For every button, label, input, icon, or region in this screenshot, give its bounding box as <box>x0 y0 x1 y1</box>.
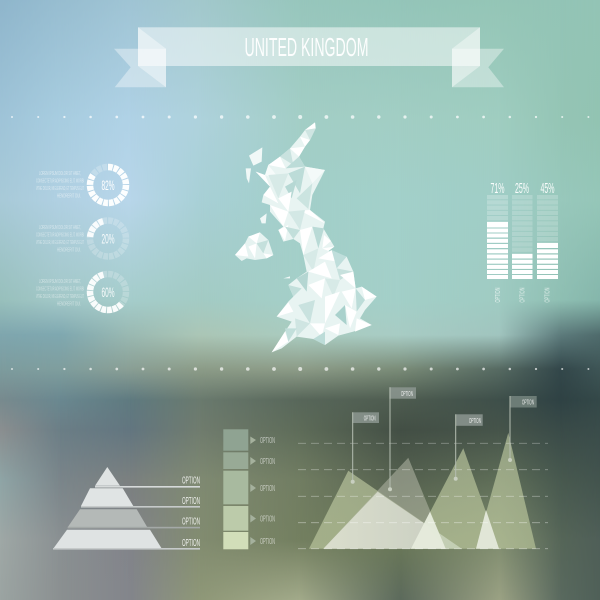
text block 60%: LOREM IPSUM DOLOR SIT AMET, <box>39 279 81 285</box>
text: OPTION <box>182 516 200 528</box>
bar 45% <box>537 195 558 279</box>
panel: donut stats: CONSECTETUR ADIPISCING ELIT. MORBI <box>36 286 84 292</box>
bar 25% <box>512 195 532 279</box>
text block 20% <box>36 225 84 254</box>
bar option labels <box>495 288 552 302</box>
text: OPTION <box>260 483 275 493</box>
map: Great Britain <box>256 122 377 352</box>
pyramid tier 3 <box>68 509 200 528</box>
text: OPTION <box>182 476 200 486</box>
text block 82% <box>36 171 84 200</box>
donut 82%: 82% <box>102 177 114 193</box>
map: Hebrides <box>246 147 290 278</box>
option arrows <box>250 436 256 545</box>
map: United Kingdom low-poly <box>235 122 377 352</box>
triangle series 1 <box>309 471 462 549</box>
bar option labels: OPTION <box>495 287 502 303</box>
text block 82%: HENDRERIT DUI. <box>57 194 81 200</box>
donut 60% <box>83 267 133 317</box>
text block 20%: HENDRERIT DUI. <box>57 248 81 254</box>
title: UNITED KINGDOM <box>244 32 368 62</box>
panel: vertical bars <box>487 180 558 302</box>
triangle series 2 <box>323 458 446 549</box>
pyramid tier 1 <box>95 467 200 488</box>
ribbon banner <box>114 27 504 87</box>
overlap 2 and 3 <box>411 512 446 549</box>
text: OPTION <box>260 536 275 546</box>
triangle series 3 <box>411 448 499 549</box>
map: Ireland <box>235 232 273 261</box>
text block 60%: HENDRERIT DUI. <box>57 302 81 308</box>
flag 4 <box>508 396 537 462</box>
triangle area chart: OPTION <box>469 416 481 425</box>
dotted divider top <box>11 115 589 119</box>
pyramid chart <box>53 467 200 550</box>
pyramid tier 2 <box>81 488 200 508</box>
donut 20%: 20% <box>102 230 114 246</box>
ribbon right fold <box>452 27 480 87</box>
bar option labels: OPTION <box>544 287 552 303</box>
bar labels <box>490 180 554 197</box>
chart grid lines <box>298 443 548 549</box>
text block 20%: LOREM IPSUM DOLOR SIT AMET, <box>39 225 81 231</box>
donut 60%: 60% <box>102 284 114 300</box>
bar 71% <box>487 195 508 279</box>
panel: donut stats: VITAE DOLOR, MI ELEIFEND, ET TEMPUS ELIT <box>36 240 84 246</box>
overlap 1 and 3 <box>411 523 462 549</box>
ribbon band <box>138 27 480 66</box>
panel: donut stats: CONSECTETUR ADIPISCING ELIT. MORBI <box>36 178 84 184</box>
text: OPTION <box>182 496 200 507</box>
triangle area chart <box>298 387 548 549</box>
text: OPTION <box>182 538 200 549</box>
triangle series 4 <box>476 433 536 549</box>
ribbon left fold <box>138 27 166 87</box>
flag 3 <box>454 414 483 481</box>
panel: donut stats: VITAE DOLOR, MI ELEIFEND, ET TEMPUS ELIT <box>36 186 84 192</box>
text block 82%: LOREM IPSUM DOLOR SIT AMET, <box>39 171 81 177</box>
pyramid tier 4 <box>53 530 200 550</box>
flag 2: OPTION <box>401 389 413 398</box>
text: OPTION <box>260 514 275 524</box>
overlap 3 and 4 <box>476 510 499 549</box>
text: OPTION <box>260 456 275 466</box>
text: OPTION <box>260 435 275 445</box>
bar labels: 25% <box>515 180 529 197</box>
text block 60% <box>36 279 84 308</box>
panel: vertical bars: 45% <box>540 180 554 197</box>
flag 4: OPTION <box>522 398 534 407</box>
panel: donut stats: CONSECTETUR ADIPISCING ELIT. MORBI <box>36 232 84 238</box>
flag 1: OPTION <box>364 414 376 422</box>
stack segments <box>223 429 248 549</box>
option labels <box>260 435 275 546</box>
donut 20% <box>88 219 128 258</box>
bar labels: 71% <box>490 180 504 197</box>
overlap 1 and 2 <box>323 492 446 549</box>
flag 2 <box>388 387 416 491</box>
panel: donut stats <box>36 167 133 317</box>
bar option labels: OPTION <box>520 287 526 303</box>
dotted divider middle <box>11 367 589 371</box>
ribbon left tail <box>114 49 166 87</box>
ribbon right tail <box>452 49 504 87</box>
stacked column with options <box>223 429 275 549</box>
panel: donut stats: VITAE DOLOR, MI ELEIFEND, ET TEMPUS ELIT <box>36 294 84 300</box>
donut 82% <box>90 167 126 203</box>
flag 1 <box>351 412 379 484</box>
